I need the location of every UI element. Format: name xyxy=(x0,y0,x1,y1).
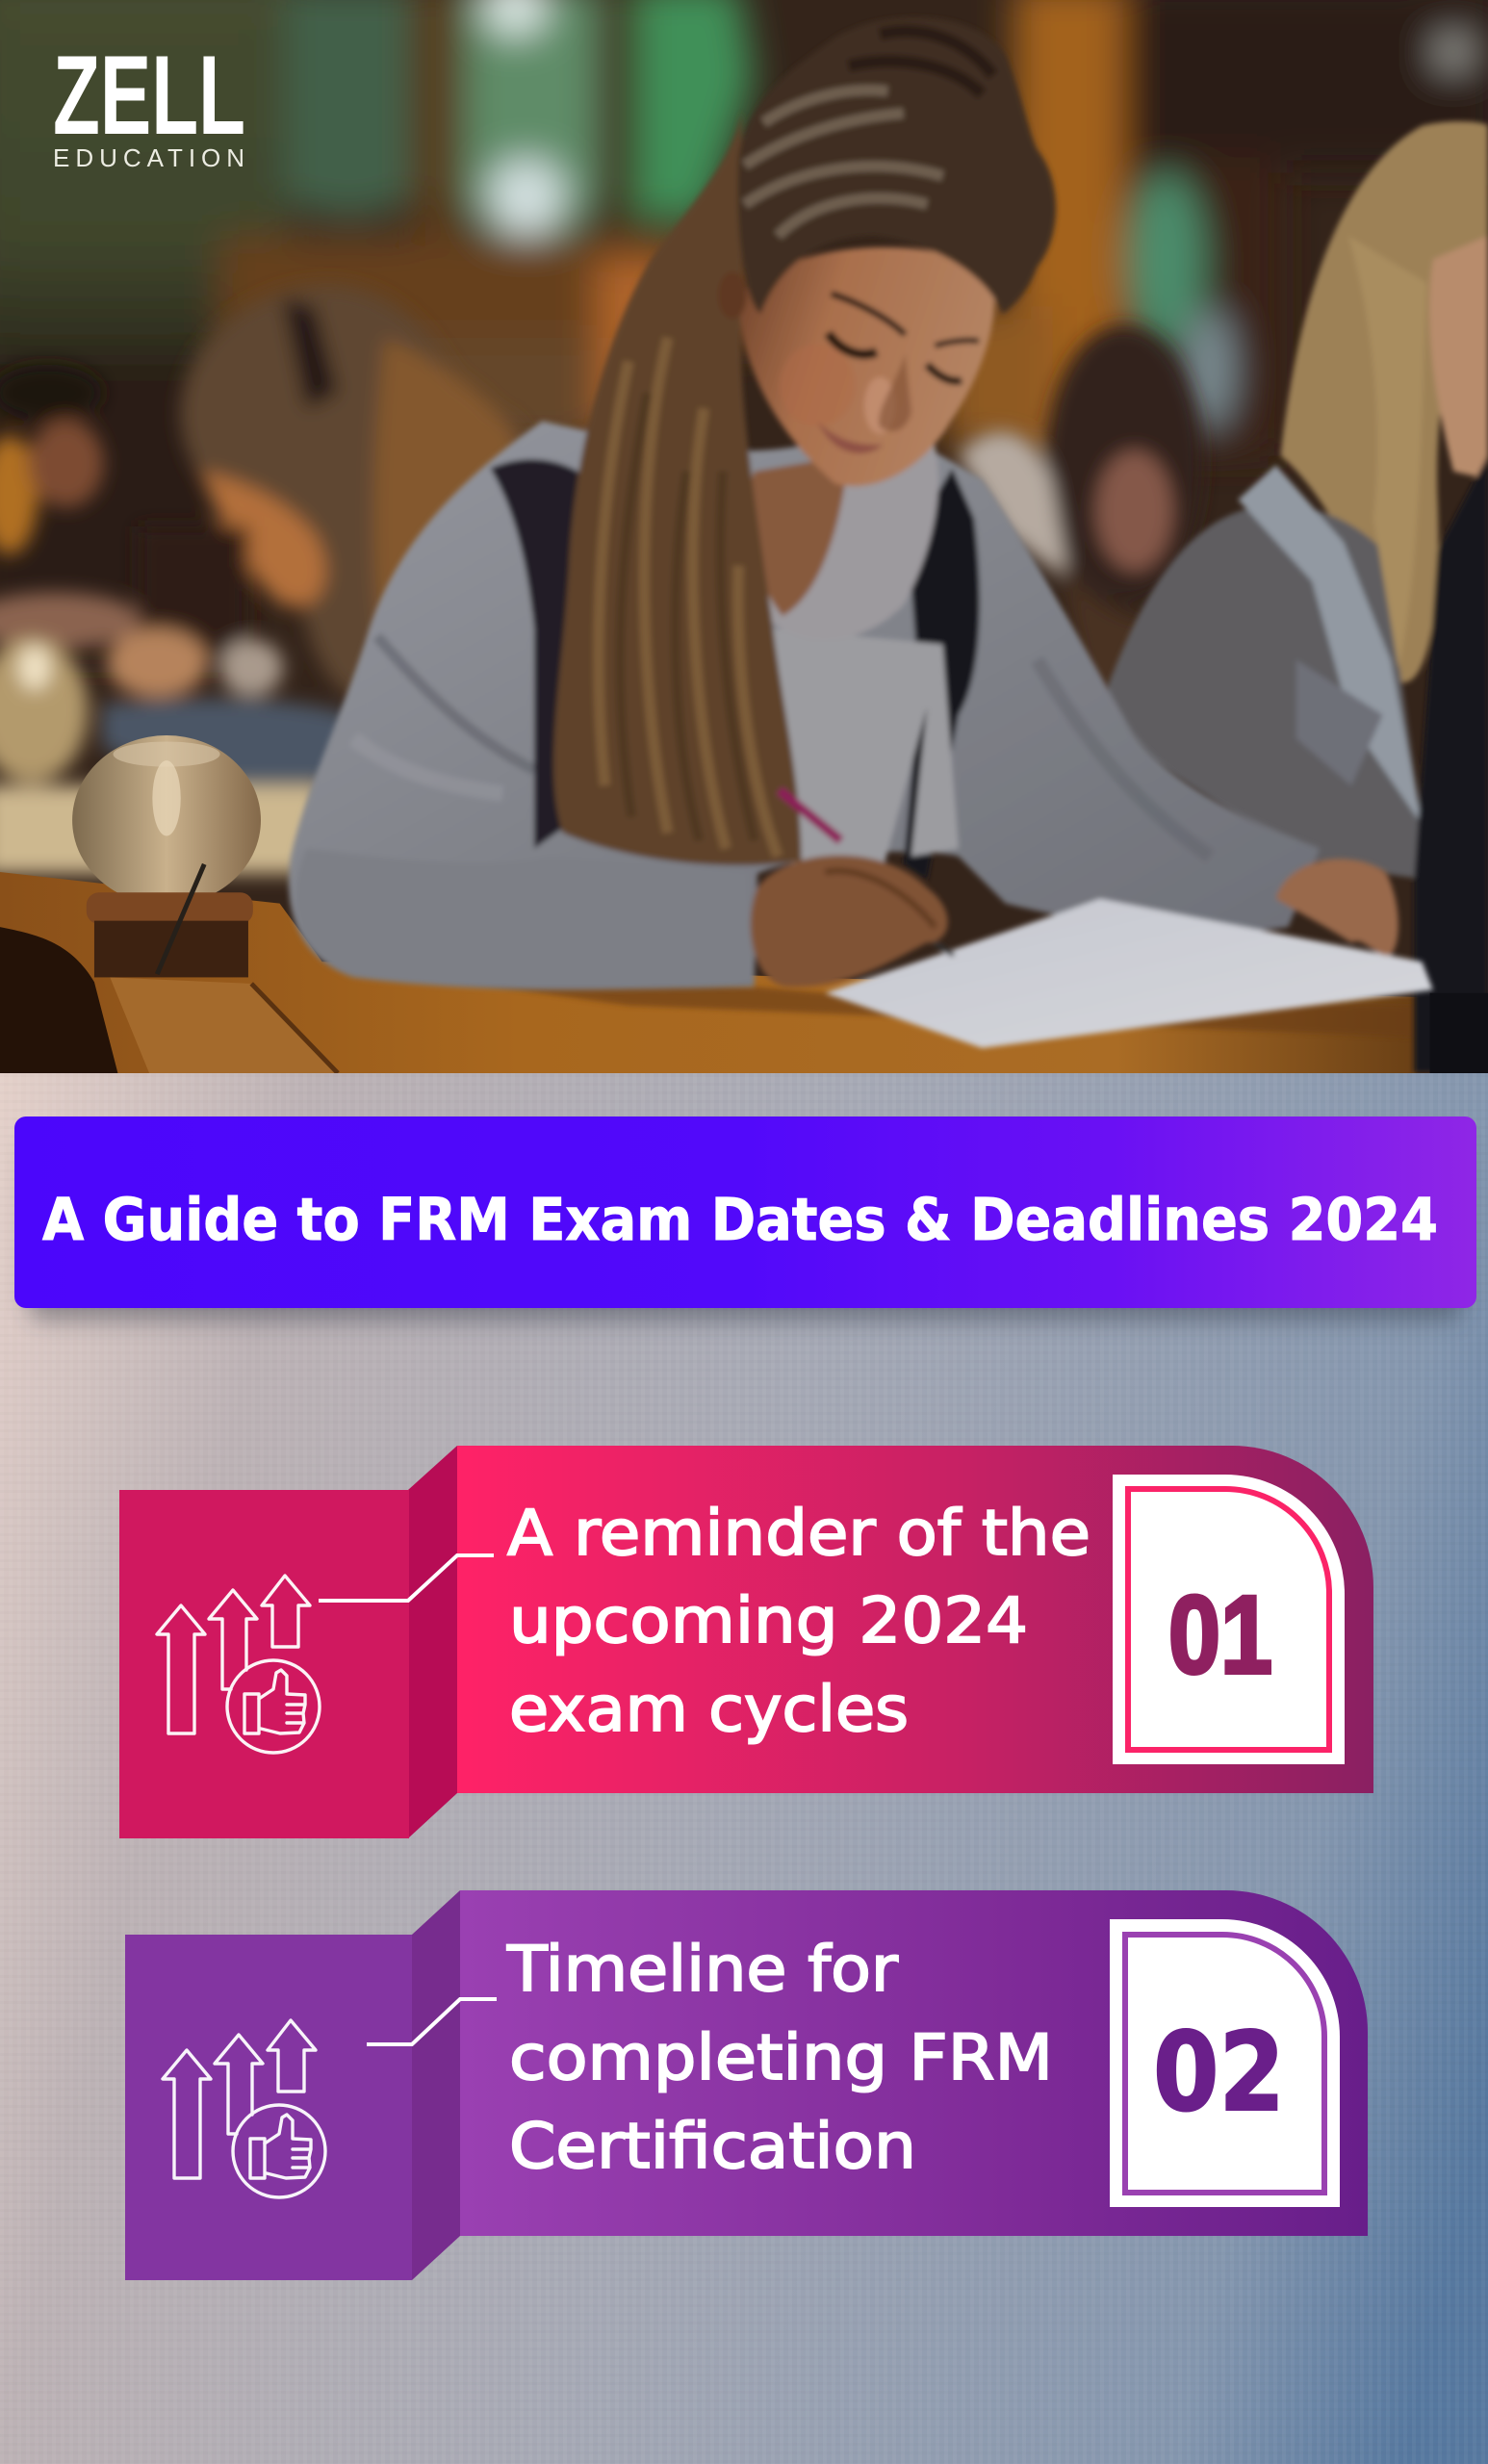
table xyxy=(0,872,1488,1073)
logo xyxy=(53,32,245,172)
straps xyxy=(490,459,578,849)
panel 01 fold xyxy=(408,1446,457,1838)
hair top and bun xyxy=(737,17,1056,314)
face xyxy=(738,247,995,486)
title banner xyxy=(14,1116,1476,1308)
panel 02 text xyxy=(506,1934,1053,2183)
long hair xyxy=(553,110,802,865)
panel 02 icon block xyxy=(125,1935,412,2280)
panel 01 text: exam cycles xyxy=(509,1674,909,1746)
hood & tee xyxy=(770,629,959,880)
icon: rising arrows with thumbs up xyxy=(157,1576,320,1753)
main student xyxy=(289,17,1433,1048)
sweatshirt xyxy=(289,422,1320,989)
panel 01 number card xyxy=(1113,1475,1345,1764)
panel 01 connector line xyxy=(319,1555,494,1601)
panel 01 icon block xyxy=(119,1490,409,1838)
panel 02 main ribbon xyxy=(460,1890,1368,2236)
blurred hall background xyxy=(0,0,1488,593)
panel 02 connector line xyxy=(367,1999,497,2044)
panel 01 text: upcoming 2024 xyxy=(509,1585,1028,1657)
icon: rising arrows with thumbs up xyxy=(163,2020,325,2197)
panel: item 01 xyxy=(119,1446,1373,1838)
left hand xyxy=(1276,859,1398,956)
number 02: 02 xyxy=(1153,2009,1285,2136)
writing hand & pen xyxy=(780,790,840,840)
panel: item 02 xyxy=(125,1890,1368,2280)
logo wordmark: ZELL xyxy=(53,32,245,158)
photo: student writing an exam in a wooden hall xyxy=(0,0,1488,1088)
panel 02 text: Certification xyxy=(509,2111,916,2183)
number 01: 01 xyxy=(1168,1574,1272,1697)
panel 02 text: Timeline for xyxy=(506,1934,898,2006)
lamp xyxy=(72,735,261,977)
panel 01 text xyxy=(507,1498,1090,1746)
right student xyxy=(1100,121,1488,1073)
panel 02 fold xyxy=(412,1890,460,2280)
logo subtitle: EDUCATION xyxy=(53,143,244,172)
panel 02 number card xyxy=(1110,1919,1340,2207)
paper xyxy=(825,899,1433,1048)
page background xyxy=(0,1073,1488,2464)
panel 02 text: completing FRM xyxy=(509,2022,1053,2094)
panel 01 main ribbon xyxy=(457,1446,1373,1793)
panel 01 text: A reminder of the xyxy=(507,1498,1090,1570)
blurred background students xyxy=(0,285,1202,874)
banner shadow xyxy=(29,1136,1463,1321)
